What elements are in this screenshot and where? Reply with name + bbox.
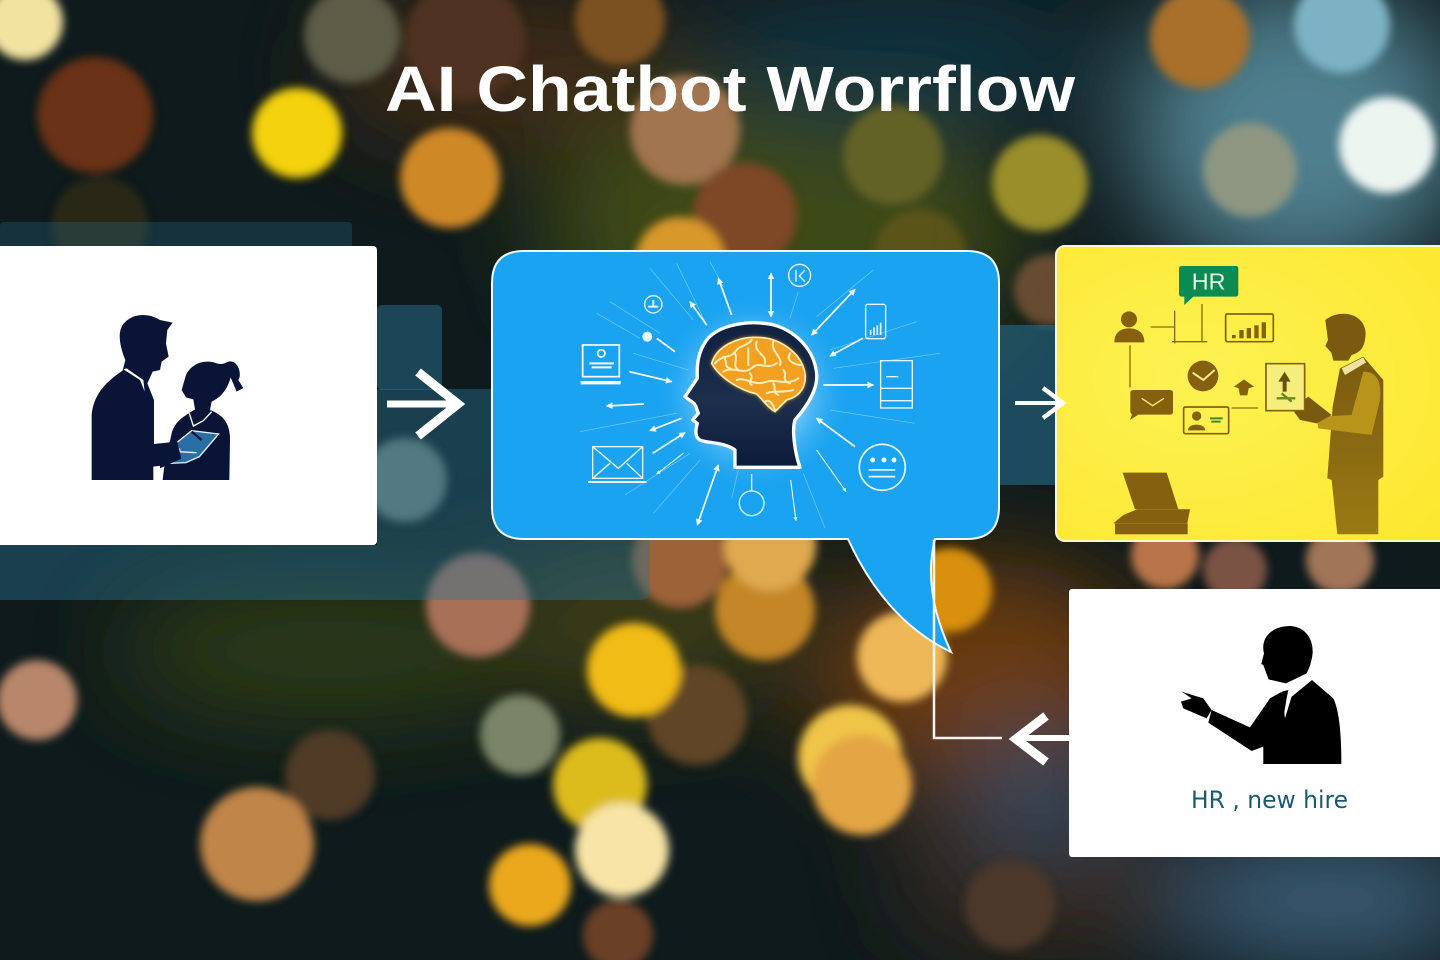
HR speech label <box>1179 266 1238 305</box>
title: AI Chatbot Worrflow <box>385 53 1075 125</box>
HR speech label: HR <box>1192 269 1226 295</box>
translucent backing panels <box>0 222 1060 600</box>
head silhouette <box>685 323 817 467</box>
icon: laptop and printer <box>1113 473 1190 534</box>
flow lines <box>1130 304 1258 408</box>
person with tablet <box>1266 314 1383 534</box>
icon: two people with tablet <box>92 315 243 480</box>
panel: AI chatbot speech bubble <box>492 251 999 652</box>
label: HR , new hire <box>1191 786 1348 814</box>
icon: tablet <box>881 361 912 408</box>
arrow: employee to chatbot <box>387 372 458 436</box>
icon: pin <box>642 332 652 342</box>
arrow: HR new hire back to chatbot <box>1016 716 1069 762</box>
arrows around head <box>607 273 873 525</box>
icon: circle badge top <box>789 264 811 286</box>
radiating rays <box>580 262 940 528</box>
icon: house <box>1234 379 1254 395</box>
glow behind head <box>657 297 850 490</box>
panel: HR, new hire <box>1069 589 1440 857</box>
icon: user <box>1114 311 1144 342</box>
icon: clock check <box>1188 361 1218 391</box>
icon: profile card <box>1184 407 1229 434</box>
icon: laptop <box>581 345 621 383</box>
icon: small circle badge <box>645 296 662 313</box>
connector: chatbot to HR panel <box>934 540 1002 738</box>
brain <box>712 337 805 412</box>
icon: presenter silhouette <box>1181 626 1341 764</box>
panel: HR tasks <box>1056 246 1440 541</box>
icon: phone <box>866 304 886 339</box>
icon: bar chart card <box>1226 314 1273 342</box>
icon: message <box>1130 390 1173 420</box>
arrow: chatbot to HR tasks <box>1015 388 1063 418</box>
icon: held tablet <box>1266 364 1305 411</box>
icon: chat face <box>859 444 905 490</box>
icon: tablet <box>171 431 219 463</box>
icon: envelope <box>588 447 647 482</box>
icon: bottom node <box>739 474 764 516</box>
panel: employee and new hire <box>0 246 377 545</box>
